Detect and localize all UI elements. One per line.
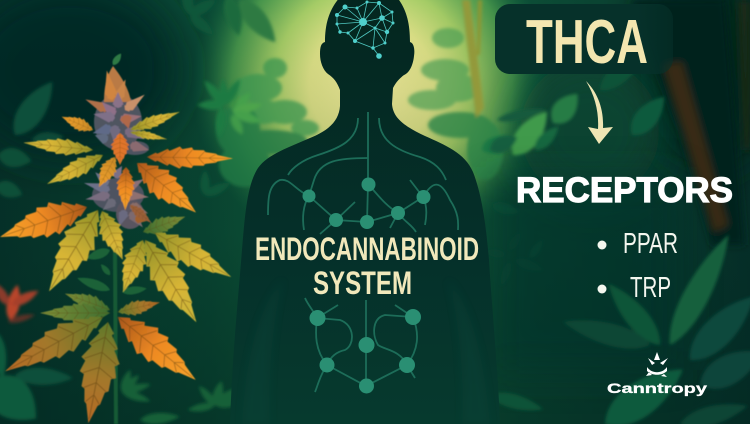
foliage bottom centre-left	[118, 368, 245, 424]
title: endocannabinoid system: SYSTEM	[313, 265, 412, 301]
stem	[113, 250, 118, 424]
leaves lower tier	[62, 286, 113, 318]
bud upper	[83, 66, 151, 155]
list: receptors: PPAR	[623, 228, 678, 260]
right side: trunk	[630, 0, 750, 245]
brain network	[335, 0, 394, 59]
foliage top right of plant	[179, 0, 244, 199]
small green leaves	[75, 52, 147, 296]
body shading	[242, 280, 490, 424]
badge: THCA	[495, 4, 673, 77]
title: endocannabinoid system: ENDOCANNABINOID	[255, 231, 479, 267]
title: endocannabinoid system	[255, 231, 479, 301]
icon: small red plant	[0, 281, 41, 325]
foliage left edge, dark	[0, 75, 73, 424]
right side: leaves	[485, 44, 673, 287]
foliage right of figure	[408, 0, 513, 180]
heading: receptors: RECEPTORS	[516, 171, 733, 210]
logo: Canntropy	[607, 352, 707, 396]
cannabis plant	[0, 52, 238, 424]
badge: THCA: THCA	[526, 8, 648, 77]
leaves middle tier	[140, 209, 188, 240]
foliage left of figure	[216, 0, 319, 187]
leaves top tier	[59, 110, 96, 136]
list: receptors: TRP	[630, 272, 671, 304]
arrow: THCA to receptors	[586, 81, 613, 144]
body network	[268, 112, 458, 394]
figure: human silhouette	[230, 0, 500, 424]
bud lower	[83, 163, 150, 231]
list: receptors	[598, 228, 678, 304]
logo: Canntropy: Canntropy	[607, 380, 707, 396]
